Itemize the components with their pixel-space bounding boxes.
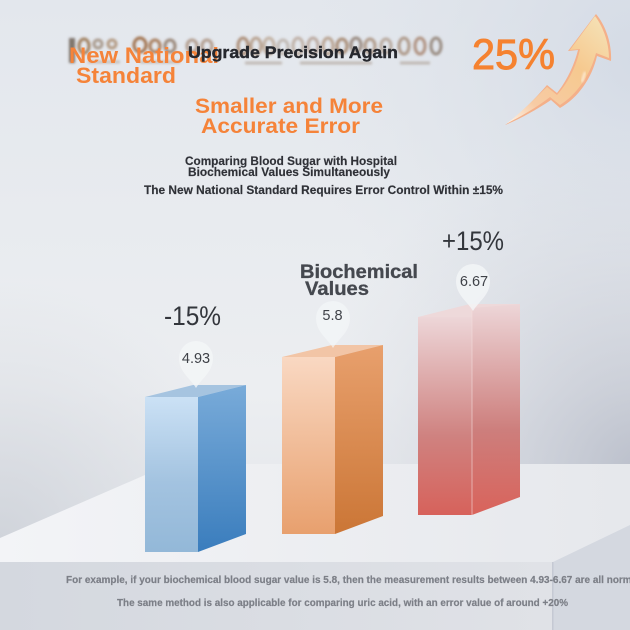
pin: 6.67	[456, 264, 490, 311]
footnote text: The same method is also applicable for comparing uric acid, with an error value of around +20%	[117, 597, 569, 609]
pin: 5.8: 5.8	[322, 308, 343, 324]
pin: 4.93	[179, 341, 213, 388]
pin: 6.67: 6.67	[460, 274, 488, 290]
description text: The New National Standard Requires Error Control Within ±15%	[144, 183, 503, 197]
footnote text	[66, 574, 630, 609]
bar: biochemical value (orange)	[282, 345, 383, 534]
blurred ghost heading strip	[69, 38, 441, 63]
description text: Comparing Blood Sugar with Hospital	[185, 154, 397, 168]
label: -15%: -15%	[164, 301, 221, 331]
icon: rising arrow	[505, 14, 611, 125]
percentage: 25%: 25%	[472, 31, 555, 79]
label: Biochemical Values: Biochemical	[300, 262, 418, 283]
heading: Smaller and More Accurate Error: Accurate Error	[201, 115, 360, 138]
label: +15%: +15%	[442, 226, 504, 256]
description text: Biochemical Values Simultaneously	[188, 165, 390, 179]
label: Biochemical Values	[300, 262, 418, 300]
pin: 4.93: 4.93	[182, 351, 210, 367]
heading: Upgrade Precision Again: Upgrade Precision Again	[188, 43, 398, 62]
description text	[144, 154, 503, 197]
heading: Smaller and More Accurate Error: Smaller and More	[195, 95, 383, 118]
bar: lower limit (blue)	[145, 385, 246, 552]
heading: Smaller and More Accurate Error	[195, 95, 383, 138]
bar: upper limit (red)	[418, 304, 520, 515]
faint ghost footnote strip	[75, 568, 535, 572]
label: Biochemical Values: Values	[305, 279, 369, 300]
bar chart	[145, 226, 520, 552]
heading: New National Standard	[69, 43, 219, 88]
heading: New National Standard: Standard	[76, 63, 176, 88]
pin: 5.8	[316, 301, 350, 348]
heading: New National Standard: New National	[69, 43, 219, 68]
